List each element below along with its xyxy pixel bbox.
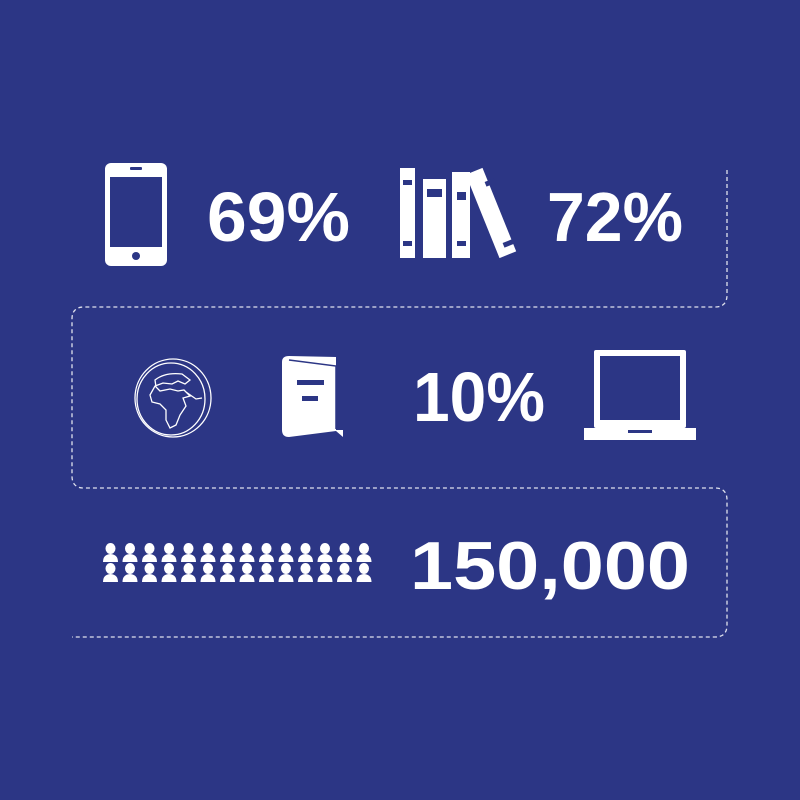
icon: smartphone (105, 163, 167, 266)
icon: globe (135, 359, 211, 437)
stat: 10%: 10% (413, 358, 545, 436)
icon: book (282, 356, 343, 437)
stat: 69%: 69% (207, 178, 350, 256)
icon: laptop (584, 350, 696, 440)
icon: people grid (103, 543, 372, 582)
stat: 150,000: 150,000 (410, 528, 690, 604)
stat: 72%: 72% (547, 178, 683, 256)
icon: books (400, 168, 516, 258)
